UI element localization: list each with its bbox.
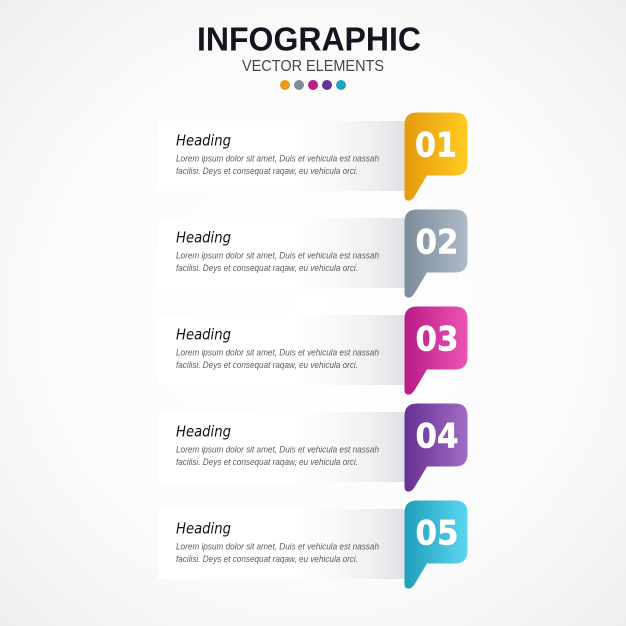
badge 01 [404,112,468,201]
badge 02 [404,210,468,298]
body text 03: facilisi. Deys et consequat raqaw, eu vehicula orci. [176,360,358,370]
body text 01 [176,154,379,176]
body text 04: facilisi. Deys et consequat raqaw, eu vehicula orci. [176,457,358,467]
panel: item 03 [158,306,468,395]
body text 05: Lorem ipsum dolor sit amet, Duis et vehicula est nassah [176,542,379,552]
text band 01 [158,121,405,191]
body text 05: facilisi. Deys et consequat raqaw, eu vehicula orci. [176,554,358,564]
body text 01: Lorem ipsum dolor sit amet, Duis et vehicula est nassah [176,154,379,164]
body text 02: facilisi. Deys et consequat raqaw, eu vehicula orci. [176,263,358,273]
text band 03 [158,315,405,385]
heading 02: Heading [176,228,231,246]
body text 02: Lorem ipsum dolor sit amet, Duis et vehicula est nassah [176,250,379,260]
heading 03: Heading [176,326,231,344]
panel: item 04 [158,404,468,492]
body text 03: Lorem ipsum dolor sit amet, Duis et vehicula est nassah [176,348,379,358]
body text 04: Lorem ipsum dolor sit amet, Duis et vehicula est nassah [176,444,379,454]
badge 03: 03 [416,320,458,358]
body text 01: facilisi. Deys et consequat raqaw, eu vehicula orci. [176,166,358,176]
badge 02: 02 [416,222,458,262]
subtitle: VECTOR ELEMENTS [242,58,384,75]
text band 02 [158,218,405,288]
text band 05 [158,509,405,579]
text band 04 [158,412,405,482]
badge 01: 01 [415,126,457,164]
heading 01: Heading [176,132,231,150]
heading 05: Heading [176,520,231,538]
title: INFOGRAPHIC [197,20,421,58]
badge 03 [404,306,468,395]
heading 04: Heading [176,422,231,440]
badge 04 [404,404,468,492]
badge 05 [404,500,468,589]
body text 05 [176,542,379,564]
badge 05: 05 [416,514,458,552]
body text 02 [176,250,379,273]
body text 03 [176,348,379,370]
body text 04 [176,444,379,467]
panel: item 05 [158,500,468,589]
badge 04: 04 [416,416,458,456]
panel: item 02 [158,210,468,298]
panel: item 01 [158,112,468,201]
colour dots [280,80,346,90]
